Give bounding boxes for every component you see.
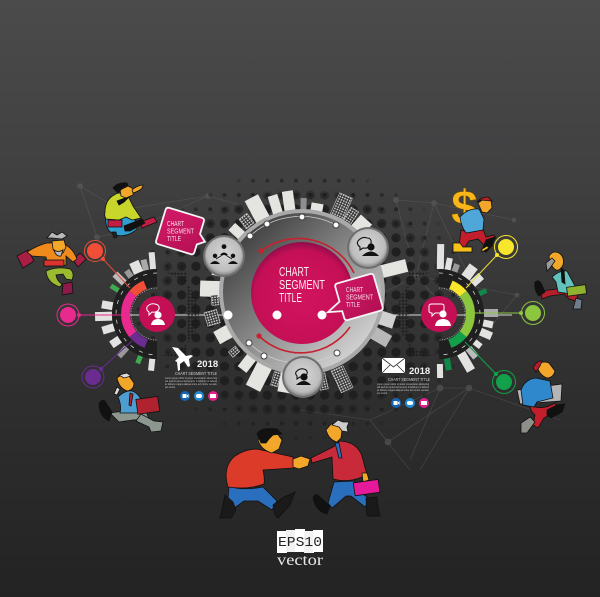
orbit dots [246,214,340,359]
body text: et dolore magna aliqua enim ad minim veniam [165,382,217,386]
body text: quis nostrud [377,391,387,395]
callout text: left: TITLE [167,234,181,243]
callout text: left [167,219,194,243]
character: handshake right man [311,420,380,516]
body text: et dolore magna aliqua enim ad minim veniam [377,388,429,392]
center title: TITLE [279,290,302,305]
EPS10 badge: EPS10 [278,535,322,551]
red arcs [259,238,354,353]
year: 2018 [197,359,218,370]
EPS10 badge [277,529,323,553]
halftone dot field [137,178,456,426]
character: yellow shirt with folders [105,183,157,238]
left info block [165,347,218,401]
character: carrying dollar sign [451,182,496,252]
hub road [121,278,157,350]
body text [377,382,430,395]
share icons [180,391,218,401]
buildings ring [200,190,408,394]
callout: right [321,273,383,325]
hub center icon [421,296,457,332]
body text [165,376,218,389]
callout text: left: SEGMENT [167,226,194,236]
right info block [377,358,430,408]
hub connectors and nodes [57,240,132,388]
small circle: chat person bottom [282,356,324,398]
hub buildings [437,244,498,378]
callout: left [155,207,211,257]
hub halftone [397,272,439,356]
thin orbit arcs [249,216,337,363]
callout text: right: SEGMENT [346,292,373,302]
dollar sign: $ [451,182,478,235]
body text: Lorem ipsum dolor sit amet consectetur adipiscing [165,376,217,380]
body text: Lorem ipsum dolor sit amet consectetur adipiscing [377,382,429,386]
network lines [78,184,560,470]
callout text: left: CHART [167,219,184,228]
hub segments [126,285,146,344]
small circle: network icon [203,235,245,277]
center title: SEGMENT [279,277,325,292]
hub road [439,278,475,350]
body text: elit sed do eiusmod tempor incididunt ut labore [377,385,430,389]
axis dots [224,310,326,320]
hub segments [450,285,470,344]
left hub [57,240,199,388]
body text: quis nostrud [165,385,175,389]
segment title: CHART SEGMENT TITLE [388,377,430,382]
character: teal shirt with green case [535,252,587,309]
character: orange jacket [17,232,86,295]
center title [279,264,325,305]
hub center icon [139,296,175,332]
body text: elit sed do eiusmod tempor incididunt ut labore [165,379,218,383]
callout text: right: CHART [346,285,363,294]
icon: envelope [382,358,405,373]
segment title: CHART SEGMENT TITLE [175,371,217,376]
icon: airplane [172,347,193,371]
hub halftone [157,272,199,356]
character: handshake left man [220,429,310,518]
hub connectors and nodes [465,236,544,394]
character: blue shirt running [99,373,163,432]
crimson circle [251,242,353,344]
right hub [397,236,544,394]
center title: CHART [279,264,309,279]
vector label: vector [277,552,324,569]
callout text: right: TITLE [346,300,360,309]
small circle: chat person top right [347,227,389,269]
central chart [200,190,408,394]
share icons [391,398,429,408]
year: 2018 [409,366,430,377]
gray disc [219,209,385,375]
horizontal axis line [95,314,512,316]
callout text: right [346,285,373,309]
character: blue jacket with paper [517,361,565,433]
hub buildings [95,252,156,371]
